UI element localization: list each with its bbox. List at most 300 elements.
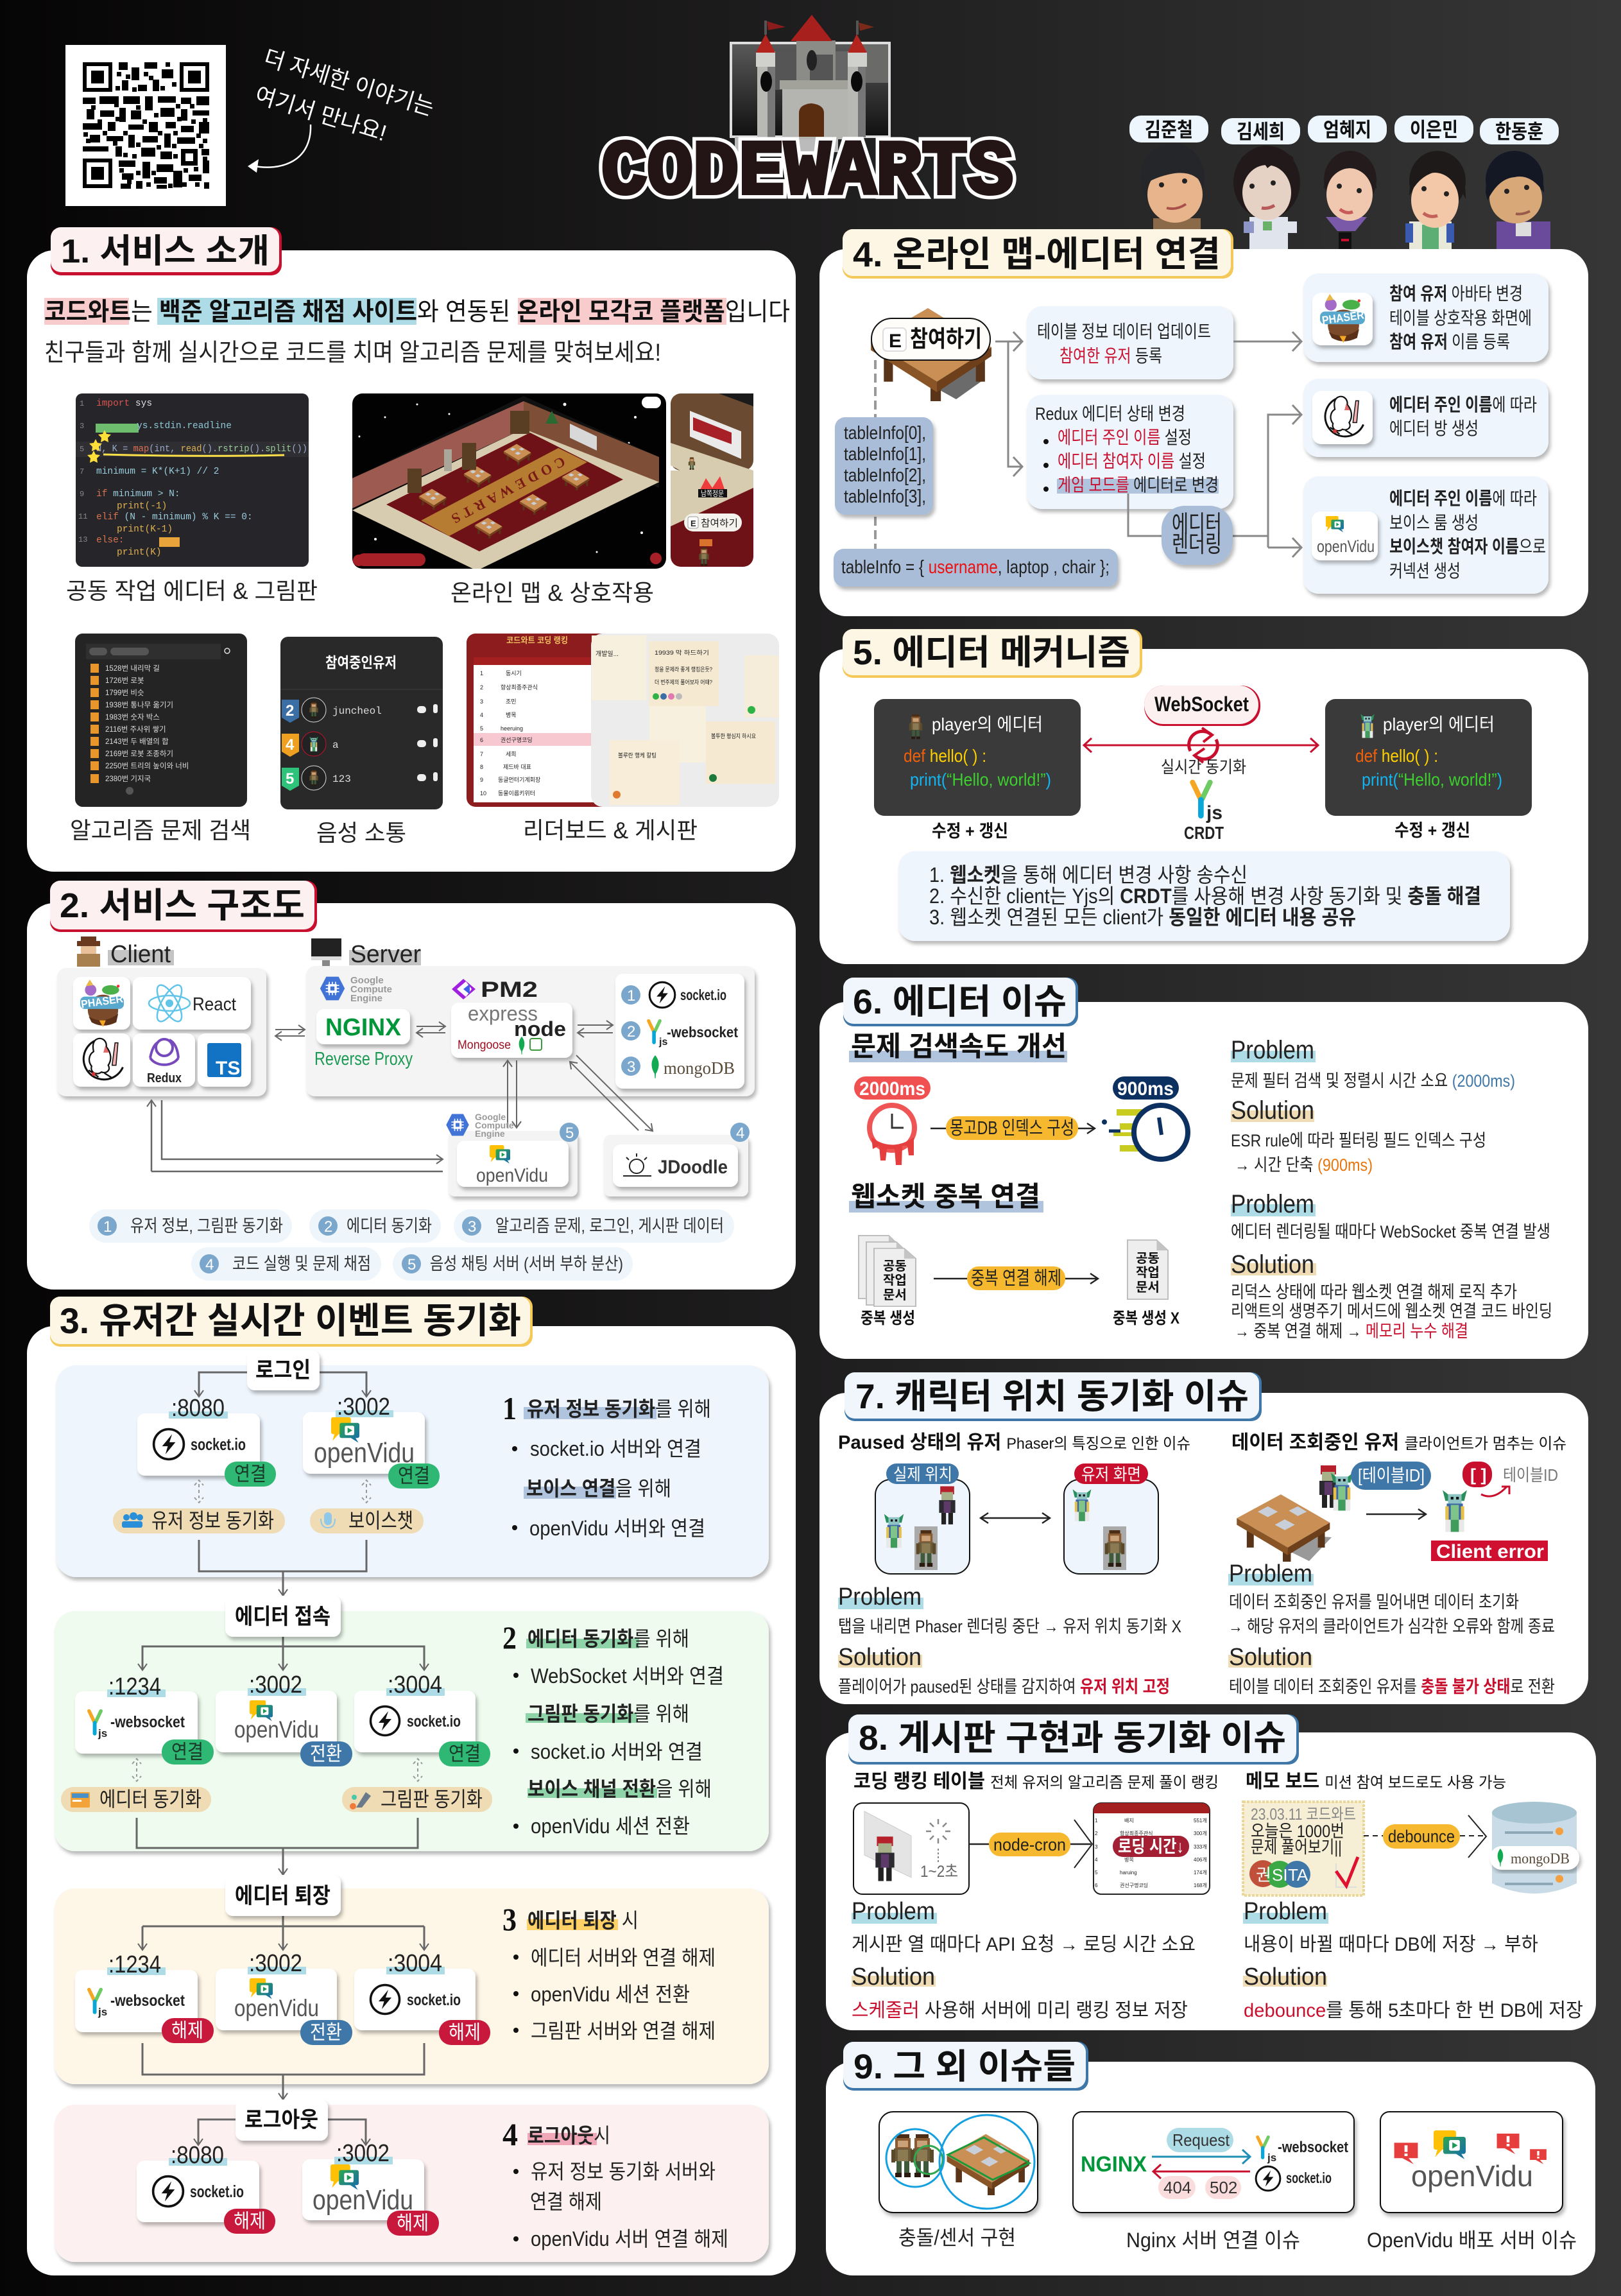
- screenshot: memo board: 정을 문제라 좋게 랭킹은듯?: [655, 666, 712, 673]
- flow: dedupe: 중복 연결 해제: [971, 1268, 1061, 1289]
- description: editor join: WebSocket 서버와 연결: [531, 1664, 724, 1687]
- issue text: querying: 테이블 데이터 조회중인 유저를 충돌 불가 상태로 전환: [1229, 1677, 1555, 1696]
- screenshot: memo board: 볼투한 평심지 하시요: [711, 733, 756, 739]
- box: table info update: 테이블 정보 데이터 업데이트: [1037, 322, 1211, 341]
- legend pills: 알고리즘 문제, 로그인, 게시판 데이터: [495, 1216, 724, 1236]
- icon: duplicate documents: [859, 1236, 916, 1306]
- card: nginx connection: 404: [1163, 2178, 1191, 2197]
- diagram: table push: [1237, 1462, 1431, 1562]
- screenshot: problem search: 1528번 내리막 길: [105, 664, 160, 673]
- server: openvidu: openVidu: [234, 1995, 319, 2021]
- screenshot: memo board: [591, 634, 779, 807]
- card: editor room: 에디터 방 생성: [1389, 419, 1479, 438]
- memo note: 오늘은 1000번: [1251, 1822, 1344, 1841]
- screenshot: code editor: [76, 393, 309, 567]
- issue text: ranking: [852, 1898, 1196, 2021]
- bubble: editor rendering: [1162, 506, 1233, 565]
- server: openvidu 3002: openVidu: [314, 1437, 415, 1469]
- icon: single document: 공동: [1136, 1252, 1160, 1266]
- diagram: user view: 유저 화면: [1081, 1465, 1141, 1484]
- issue text: memo: Problem: [1244, 1898, 1327, 1925]
- jdoodle server: [604, 1123, 750, 1196]
- heading: 2: [50, 881, 317, 932]
- flow: dedupe: [934, 1266, 1098, 1290]
- mini ranking table: 168개: [1194, 1882, 1207, 1888]
- card: openvidu deploy: [1380, 2112, 1563, 2213]
- panel: 1 service intro: [27, 227, 796, 872]
- explanation list: 3. 웹소켓 연결된 모든 client가 동일한 에디터 내용 공유: [929, 906, 1356, 929]
- explanation list: 2. 수신한 client는 Yjs의 CRDT를 사용해 변경 사항 동기화 및 충돌 해결: [929, 885, 1481, 908]
- editor: right player: def hello( ) :: [1355, 746, 1438, 766]
- card: nginx connection: [1073, 2112, 1354, 2213]
- memo note: 문제 풀어보기||: [1251, 1838, 1342, 1857]
- server: openvidu 3002: 연결: [398, 1465, 430, 1487]
- box: redux state: [1027, 395, 1233, 509]
- screenshot: memo board: 개발일...: [596, 650, 619, 658]
- server: socket.io 8080: [137, 1395, 276, 1487]
- card: nginx connection: socket.io: [1286, 2170, 1332, 2186]
- legend pills: 코드 실행 및 문제 채점: [232, 1254, 371, 1273]
- issue 1 text: → 시간 단축 (900ms): [1235, 1155, 1373, 1175]
- issue text: querying: 데이터 조회중인 유저를 밀어내면 데이터 초기화: [1229, 1593, 1519, 1612]
- card: nginx connection: 502: [1210, 2178, 1237, 2197]
- mini ranking table: 406개: [1194, 1856, 1207, 1863]
- icon: single document: [1128, 1240, 1168, 1299]
- arrows: rendering connectors: [1128, 341, 1301, 548]
- panel: 4 map to editor: [819, 229, 1588, 616]
- pill: editor sync: [61, 1787, 211, 1812]
- screenshot: problem search: 2169번 로봇 조종하기: [105, 749, 173, 758]
- arrows: client to openvidu: [151, 1100, 443, 1171]
- server: socket.io 8080: socket.io: [190, 2182, 244, 2201]
- diagram: loading user: 1~2초: [920, 1863, 958, 1881]
- server: socket.io 8080: socket.io: [191, 1435, 246, 1454]
- panel background: [819, 249, 1588, 616]
- pm2 logo: [452, 978, 538, 1002]
- screenshot: leaderboard: 조민: [506, 698, 517, 705]
- express node card: Mongoose: [458, 1039, 511, 1052]
- section: editor join: [55, 1596, 769, 1851]
- express node card: [451, 1002, 572, 1058]
- panel background: [27, 250, 796, 872]
- flow: node-cron: [969, 1820, 1092, 1868]
- server: openvidu 3002: [303, 1394, 440, 1489]
- pill: whiteboard sync: [342, 1787, 492, 1812]
- issue text: memo: Solution: [1244, 1964, 1327, 1990]
- server: openvidu: 전환: [310, 2021, 342, 2044]
- card: voice room: 커넥션 생성: [1389, 561, 1461, 581]
- screenshot: join table: [671, 470, 753, 567]
- google compute engine: Compute: [350, 984, 392, 995]
- services card: mongoDB: [664, 1058, 735, 1078]
- caption: 리더보드 & 게시판: [523, 817, 698, 843]
- client box: [57, 968, 266, 1096]
- issue text: paused: Solution: [838, 1644, 922, 1671]
- step box: editor exit: 에디터 퇴장: [235, 1884, 330, 1908]
- editor: right player: print(“Hello, world!”): [1362, 770, 1502, 790]
- mini ranking table: 5: [1095, 1870, 1098, 1876]
- member: 엄혜지: [1308, 116, 1387, 249]
- screenshot: voice chat: 5: [286, 770, 294, 788]
- illustration: table with join prompt: [871, 308, 991, 401]
- server: openvidu 3002: :3002: [336, 2140, 390, 2167]
- description: login: 보이스 연결을 위해: [526, 1477, 671, 1500]
- description: logout: 4: [502, 2116, 518, 2152]
- arrow: express right: [578, 1025, 613, 1033]
- description: editor exit: 에디터 서버와 연결 해제: [531, 1946, 716, 1969]
- screenshot: memo board: 볼루란 행케 칼팅: [618, 752, 656, 759]
- member: 김세희: 김세희: [1237, 121, 1285, 143]
- icon: single document: 문서: [1136, 1280, 1160, 1295]
- tableInfo list: tableInfo[1],: [844, 444, 926, 465]
- box: redux state: 에디터 주인 이름 설정: [1058, 427, 1192, 447]
- server: yjs websocket: :1234: [108, 1673, 161, 1700]
- heading: 8: 8. 게시판 구현과 동기화 이슈: [859, 1719, 1286, 1757]
- screenshot: leaderboard: 9: [480, 777, 483, 783]
- services card: -websocket: [667, 1024, 738, 1040]
- section: logout: [55, 2100, 769, 2262]
- card: voice room: 에디터 주인 이름에 따라: [1389, 488, 1537, 508]
- editor: left player: player의 에디터: [932, 714, 1043, 734]
- description: login: socket.io 서버와 연결: [530, 1437, 701, 1460]
- screenshot: leaderboard: 10: [480, 790, 486, 797]
- caption: 온라인 맵 & 상호작용: [450, 580, 654, 606]
- member: 김준철: 김준철: [1145, 119, 1193, 141]
- issue 1 text: Problem: [1231, 1036, 1314, 1064]
- screenshot: code editor: elif (N - minimum) % K == 0:: [96, 512, 253, 522]
- card: redux: [133, 1033, 195, 1087]
- server: openvidu 3002: 해제: [397, 2212, 429, 2234]
- legend pills: 음성 채팅 서버 (서버 부하 분산): [430, 1254, 623, 1273]
- server: openvidu: openVidu: [234, 1716, 319, 1743]
- description: login: 유저 정보 동기화를 위해: [527, 1397, 711, 1420]
- arrows: express to openvidu: [508, 1060, 517, 1128]
- editor: left player: print(“Hello, world!”): [910, 770, 1051, 790]
- arrow: realtime link: [1084, 745, 1318, 746]
- diagram: client error: Client error: [1436, 1541, 1544, 1562]
- panel: 8 board implementation: [826, 1714, 1596, 2030]
- panel background: [819, 1002, 1588, 1359]
- panel: 2 service architecture: [27, 881, 796, 1290]
- server: socket.io: :3004: [388, 1671, 442, 1698]
- heading: 1: [51, 227, 282, 275]
- member: 김세희: [1221, 118, 1300, 249]
- QR callout text and arrow: [248, 45, 437, 173]
- card: typescript: TS: [216, 1058, 240, 1079]
- screenshot: memo board: 19939 막 하드하기: [655, 650, 709, 656]
- card: voice room: 보이스챗 참여자 이름으로: [1389, 537, 1546, 557]
- arrow: nginx express: [416, 1026, 445, 1033]
- nginx card: NGINX: [325, 1014, 402, 1041]
- screenshot: leaderboard: 세희: [506, 750, 517, 757]
- description: editor join: 2: [502, 1619, 517, 1655]
- screenshot: code editor: if minimum > N:: [96, 489, 180, 499]
- screenshot: problem search: 1938번 통나무 옮기기: [105, 701, 173, 709]
- badge: 2000ms: 2000ms: [859, 1078, 925, 1100]
- screenshot: code editor: ys.stdin.readline: [137, 421, 232, 431]
- issue text: memo: 내용이 바뀔 때마다 DB에 저장 → 부하: [1244, 1934, 1538, 1955]
- jdoodle server: JDoodle: [658, 1157, 728, 1178]
- editor: right player: [1325, 699, 1532, 816]
- heading: 2: 2. 서비스 구조도: [60, 886, 305, 925]
- icon: duplicate documents: 공동: [883, 1259, 907, 1273]
- card: react: React: [193, 994, 236, 1015]
- caption: 중복 생성: [861, 1309, 915, 1327]
- screenshot: leaderboard: 동물이름키위터: [498, 790, 535, 797]
- panel background: [819, 1393, 1588, 1704]
- step box: logout: [236, 2100, 328, 2141]
- tableInfo list: tableInfo[0],: [844, 423, 926, 444]
- server: socket.io 8080: :8080: [171, 1395, 225, 1422]
- screenshot: voice chat: [280, 637, 443, 809]
- screenshot: leaderboard: 1: [480, 670, 483, 677]
- subheading: memo board: 메모 보드 미션 참여 보드로도 사용 가능: [1246, 1771, 1506, 1792]
- services card: 1: [627, 987, 635, 1005]
- icon: stopwatch: [1102, 1105, 1188, 1159]
- screenshot: leaderboard: 코드와트 코딩 랭킹: [506, 635, 568, 645]
- mini ranking table: 권선구명코딩: [1120, 1882, 1148, 1888]
- card: phaser: [73, 977, 130, 1030]
- server: openvidu: [216, 1671, 352, 1766]
- logo: yjs crdt: CRDT: [1184, 823, 1224, 843]
- badge: 900ms: 900ms: [1117, 1078, 1174, 1100]
- issue 1 text: Solution: [1231, 1096, 1314, 1125]
- card: avatar update: [1303, 273, 1548, 362]
- issue 2 text: 리액트의 생명주기 메서드에 웹소켓 연결 코드 바인딩: [1231, 1302, 1552, 1321]
- card: nginx connection: NGINX: [1081, 2152, 1147, 2177]
- panel background: [819, 649, 1588, 964]
- panel background: [826, 2062, 1595, 2275]
- nginx card: [316, 1009, 410, 1044]
- express node card: node: [514, 1017, 566, 1040]
- flow: node-cron: node-cron: [993, 1835, 1066, 1854]
- screenshot: problem search: 2143번 두 배열의 합: [105, 738, 169, 746]
- card: voice room: openVidu: [1317, 537, 1375, 556]
- description: editor exit: 3: [502, 1901, 517, 1937]
- openvidu server: Google: [475, 1112, 506, 1122]
- card: typescript: [198, 1033, 251, 1087]
- screenshot: problem search: 2116번 주사위 쌓기: [105, 725, 166, 734]
- panel background: [27, 903, 796, 1290]
- client label: [77, 937, 174, 968]
- member: 이은민: [1394, 116, 1473, 249]
- flow: debounce: [1364, 1815, 1486, 1858]
- panel: 3 realtime event sync: [27, 1297, 796, 2275]
- server: openvidu 3002: [302, 2140, 439, 2236]
- icon: database: [1490, 1802, 1579, 1894]
- diagram: real position: [875, 1463, 970, 1574]
- screenshot: code editor: else:: [96, 535, 124, 546]
- screenshot: leaderboard: 동글먼터기계회장: [498, 776, 540, 783]
- card: voice room: [1303, 476, 1548, 594]
- description: editor join: 에디터 동기화를 위해: [527, 1627, 689, 1650]
- issue 1 text: ESR rule에 따라 필터링 필드 인덱스 구성: [1231, 1131, 1486, 1150]
- diagram: table push: [테이블ID]: [1358, 1465, 1425, 1485]
- icon: duplicate documents: 문서: [883, 1288, 907, 1302]
- description: editor join: [502, 1619, 724, 1838]
- card: avatar update: 참여 유저 이름 등록: [1389, 332, 1510, 352]
- screenshot: code editor: 7: [80, 467, 84, 476]
- icon: melting clock: [870, 1105, 914, 1165]
- screenshot: join table: 남쪽정문: [701, 489, 724, 498]
- logo: castle: [731, 15, 889, 152]
- bubble: editor rendering: 렌더링: [1172, 531, 1222, 557]
- step box: editor exit: [225, 1875, 341, 1916]
- server: socket.io: socket.io: [407, 1991, 461, 2009]
- screenshot: code editor: 11: [78, 512, 87, 521]
- explanation list: [898, 851, 1510, 941]
- server: socket.io: 연결: [449, 1743, 481, 1765]
- server: openvidu: :3002: [249, 1950, 302, 1977]
- screenshot: voice chat: 123: [332, 773, 351, 785]
- description: logout: [502, 2116, 728, 2250]
- flow: mongodb index: 몽고DB 인덱스 구성: [950, 1118, 1074, 1139]
- card: editor room: [1303, 379, 1548, 457]
- illustration: table with join prompt: 참여하기: [910, 325, 982, 352]
- screenshot: problem search: 1983번 숫자 박스: [105, 713, 160, 721]
- diagram: client error: 테이블ID: [1503, 1465, 1558, 1485]
- services card: js: [658, 1037, 667, 1048]
- legend pills: 유저 정보, 그림판 동기화: [130, 1216, 283, 1236]
- screenshot: leaderboard: 권선구명코딩: [501, 736, 533, 743]
- description: login: [502, 1390, 711, 1540]
- server label: Server: [350, 941, 421, 968]
- screenshot: code editor: 1: [80, 399, 84, 408]
- issue text: memo: debounce를 통해 5초마다 한 번 DB에 저장: [1244, 2000, 1583, 2021]
- issue text: ranking: 스케줄러 사용해 서버에 미리 랭킹 정보 저장: [852, 2000, 1188, 2021]
- screenshot: problem search: 1726번 로봇: [105, 677, 144, 685]
- description: editor exit: openVidu 세션 전환: [531, 1983, 690, 2006]
- issue 2 text: Solution: [1231, 1250, 1314, 1279]
- issue 1 text: 문제 필터 검색 및 정렬시 시간 소요 (2000ms): [1231, 1071, 1515, 1091]
- screenshot: leaderboard: 6: [480, 737, 483, 743]
- screenshot: voice chat: a: [332, 739, 339, 751]
- description: editor join: 그림판 동기화를 위해: [527, 1702, 689, 1725]
- diagram: client error: [ ]: [1470, 1465, 1486, 1485]
- screenshot: code editor: 5: [80, 445, 84, 454]
- services card: [615, 974, 744, 1089]
- flow: debounce: debounce: [1388, 1827, 1455, 1846]
- panel: 7 character position: [819, 1372, 1588, 1704]
- screenshot: join table: E: [690, 519, 696, 528]
- server: yjs websocket: 해제: [171, 2019, 203, 2042]
- server: yjs websocket: 연결: [171, 1741, 203, 1763]
- screenshot: leaderboard: 3: [480, 698, 483, 705]
- mini ranking table: 333개: [1194, 1843, 1207, 1850]
- logo: yjs crdt: [1184, 782, 1224, 843]
- pill: user sync: 유저 정보 동기화: [151, 1509, 274, 1532]
- panel: 6 editor issues: [819, 978, 1588, 1359]
- screenshot: voice chat: 4: [286, 736, 295, 754]
- heading: 4: 4. 온라인 맵-에디터 연결: [853, 234, 1221, 274]
- card: avatar update: 테이블 상호작용 화면에: [1389, 308, 1532, 328]
- arrows: join to boxes: [995, 341, 1022, 467]
- description: logout: 유저 정보 동기화 서버와: [531, 2160, 716, 2183]
- issue 1 text: [1231, 1036, 1515, 1175]
- icon: single document: 작업: [1136, 1265, 1160, 1280]
- server: socket.io: socket.io: [407, 1713, 461, 1731]
- screenshot: leaderboard: 5: [480, 725, 483, 732]
- logo: CODEWARTS wordmark: CODEWARTS: [601, 130, 1013, 217]
- description: logout: 로그아웃시: [527, 2124, 610, 2147]
- arrows: express to jdoodle: [570, 1055, 653, 1131]
- card: rabbit logo: [73, 1033, 130, 1087]
- description: editor exit: 에디터 퇴장 시: [527, 1909, 639, 1932]
- client label: Client: [110, 941, 171, 968]
- member: 이은민: 이은민: [1410, 119, 1458, 141]
- member: 한동훈: [1480, 118, 1559, 249]
- legend pills: 2: [324, 1218, 332, 1236]
- step box: editor join: 에디터 접속: [235, 1605, 330, 1629]
- mini ranking table: 551개: [1194, 1817, 1207, 1824]
- caption: 충돌/센서 구현: [898, 2226, 1016, 2249]
- caption: 공동 작업 에디터 & 그림판: [66, 578, 318, 604]
- jdoodle server: 4: [736, 1125, 744, 1142]
- icon: sync: [1189, 728, 1217, 763]
- pill: editor sync: 에디터 동기화: [99, 1788, 202, 1811]
- server: yjs websocket: [75, 1673, 214, 1765]
- mini ranking table: 로딩 시간↓: [1118, 1837, 1184, 1856]
- reverse proxy label: Reverse Proxy: [314, 1049, 413, 1069]
- server: yjs websocket: [75, 1951, 214, 2043]
- issue 2 text: Problem: [1231, 1190, 1314, 1218]
- pill: user sync: [113, 1508, 285, 1533]
- heading: 3: 3. 유저간 실시간 이벤트 동기화: [60, 1300, 521, 1341]
- memo note: SI: [1272, 1865, 1288, 1885]
- heading: 6: 6. 에디터 이슈: [853, 983, 1067, 1021]
- express node card: express: [468, 1002, 538, 1025]
- server: yjs websocket: js: [98, 1727, 107, 1739]
- screenshot: board kiosk: [671, 393, 753, 470]
- logo: yjs crdt: js: [1206, 802, 1222, 824]
- screenshot: leaderboard: 7: [480, 751, 483, 757]
- card: nginx connection: Request: [1172, 2130, 1230, 2150]
- legend pills: 3: [468, 1218, 476, 1236]
- screenshot: online map: [352, 393, 666, 571]
- card: react: [133, 977, 251, 1030]
- QR callout text and arrow: 더 자세한 이야기는: [261, 45, 437, 121]
- issue 2 text: 리덕스 상태에 따라 웹소켓 연결 해제 로직 추가: [1231, 1282, 1517, 1302]
- memo note: 23.03.11 코드와트: [1251, 1806, 1356, 1824]
- subheading: ranking table: 코딩 랭킹 테이블 전체 유저의 알고리즘 문제 풀이 랭킹: [853, 1771, 1219, 1792]
- screenshot: memo board: 더 번주제의 풀어보자 어때?: [655, 679, 712, 686]
- mini ranking table: 174개: [1194, 1869, 1207, 1876]
- google compute engine: [320, 975, 392, 1004]
- issue text: ranking: Problem: [852, 1898, 935, 1925]
- screenshot: leaderboard: 동시기: [506, 670, 522, 677]
- heading: 9: 9. 그 외 이슈들: [853, 2048, 1076, 2086]
- tableInfo list: [835, 417, 933, 515]
- screenshot: leaderboard: 2: [480, 684, 483, 691]
- description: logout: 연결 해제: [530, 2190, 602, 2213]
- memo note: TA: [1288, 1865, 1308, 1885]
- screenshot: code editor: print(K): [117, 548, 162, 558]
- mini ranking table: 2: [1095, 1831, 1098, 1836]
- explanation list: 1. 웹소켓을 통해 에디터 변경 사항 송수신: [929, 863, 1248, 886]
- screenshot: leaderboard: 항상최종주관식: [501, 684, 538, 691]
- server: socket.io: 해제: [449, 2021, 481, 2044]
- server: yjs websocket: js: [98, 2006, 107, 2018]
- openvidu server: openVidu: [476, 1165, 548, 1186]
- subheading: paused user: Paused 상태의 유저 Phaser의 특징으로 인한 이슈: [838, 1432, 1190, 1453]
- diagram: real position: 실제 위치: [893, 1465, 952, 1484]
- screenshot: code editor: 3: [80, 422, 84, 431]
- subheading: querying user: 데이터 조회중인 유저 클라이언트가 멈추는 이슈: [1231, 1432, 1566, 1453]
- box: redux state: 에디터 참여자 이름 설정: [1058, 451, 1206, 471]
- openvidu server: Engine: [475, 1128, 505, 1139]
- card: avatar update: 참여 유저 아바타 변경: [1389, 284, 1523, 304]
- heading: 9: [843, 2042, 1088, 2091]
